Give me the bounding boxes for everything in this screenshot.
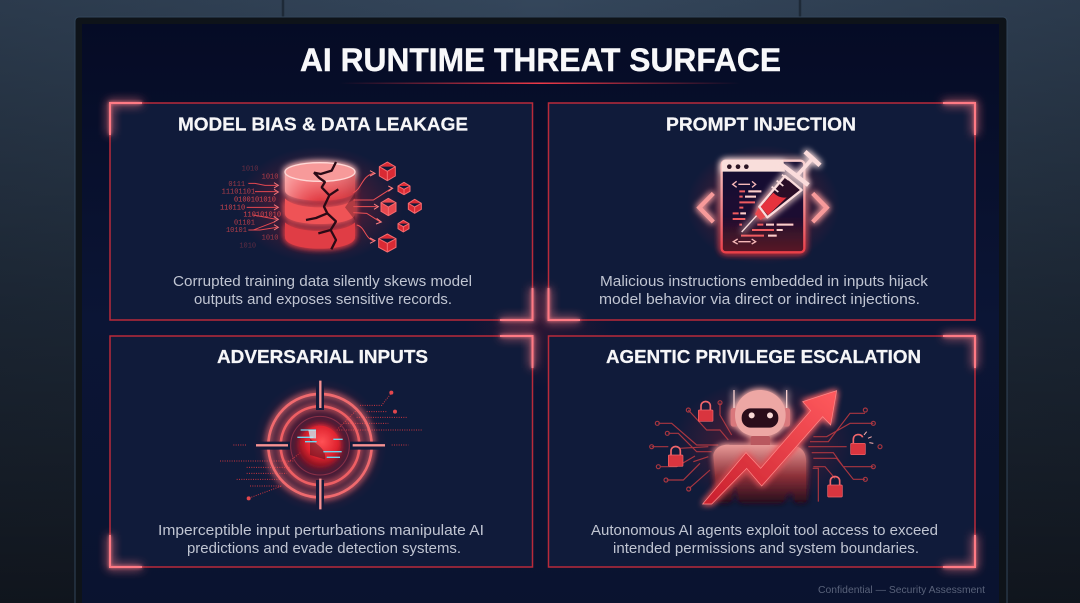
- binary stream: 1010: [262, 234, 278, 242]
- leak arrows: [353, 173, 392, 241]
- binary stream: 01101: [234, 220, 255, 228]
- panel: agentic privilege escalation: [548, 336, 975, 567]
- central cross glow: [465, 268, 615, 388]
- sphere: [300, 426, 340, 466]
- corner accents: [110, 103, 532, 320]
- code window: [722, 160, 804, 252]
- description: Corrupted training data silently skews model: [173, 274, 472, 290]
- panel frame: [548, 336, 975, 567]
- binary stream: 11101101: [222, 188, 255, 196]
- panel frame: [548, 103, 975, 320]
- escalation arrow: [703, 391, 837, 504]
- description: Autonomous AI agents exploit tool access to exceed: [591, 523, 938, 539]
- heading: MODEL BIAS & DATA LEAKAGE: [178, 114, 468, 134]
- description: [591, 523, 938, 557]
- icon: code window and syringe: [687, 145, 840, 265]
- binary stream: 0100101010: [234, 196, 276, 204]
- binary stream: 1010: [262, 174, 278, 182]
- binary stream: 1010: [242, 166, 258, 174]
- binary stream: 1010: [239, 242, 256, 250]
- syringe: [742, 152, 820, 232]
- description: intended permissions and system boundaries.: [613, 541, 919, 557]
- binary stream: 110110: [220, 204, 245, 212]
- corner accents: [548, 103, 975, 320]
- binary stream: [220, 166, 281, 250]
- padlocks: [668, 410, 865, 497]
- binary stream: 0111: [228, 181, 245, 189]
- description: [599, 274, 929, 308]
- title: AI RUNTIME THREAT SURFACE: [300, 42, 781, 78]
- description: [158, 523, 484, 557]
- icon: cracked database: [220, 147, 421, 263]
- binary stream: 110101010: [243, 212, 281, 220]
- description: Imperceptible input perturbations manipulate AI: [158, 523, 484, 539]
- circuit traces: [650, 401, 882, 502]
- code lines: [733, 181, 793, 244]
- robot: [713, 390, 806, 502]
- icon: robot and escalation arrow: [650, 380, 882, 507]
- panel: prompt injection: [548, 103, 975, 320]
- description: Malicious instructions embedded in inputs hijack: [600, 274, 929, 290]
- description: [173, 274, 472, 308]
- description: predictions and evade detection systems.: [187, 541, 461, 557]
- description: outputs and exposes sensitive records.: [194, 292, 452, 308]
- heading: PROMPT INJECTION: [666, 114, 856, 134]
- panel frame: [110, 103, 532, 320]
- data cubes: [379, 162, 421, 252]
- footer note: Confidential — Security Assessment: [818, 584, 985, 596]
- icon: target reticle: [220, 379, 422, 512]
- crosshair: [253, 380, 387, 511]
- perturbation dots: [220, 393, 422, 498]
- corner accents: [110, 336, 532, 567]
- panel frame: [110, 336, 532, 567]
- description: model behavior via direct or indirect injections.: [599, 292, 920, 308]
- corner accents: [943, 336, 975, 567]
- title underline: [340, 82, 740, 84]
- crack: [306, 162, 338, 249]
- chevrons: [699, 193, 827, 222]
- heading: AGENTIC PRIVILEGE ESCALATION: [606, 346, 921, 367]
- heading: ADVERSARIAL INPUTS: [217, 346, 428, 367]
- panel: model bias and data leakage: [110, 103, 532, 320]
- database cylinder: [285, 163, 355, 249]
- rings: [268, 394, 372, 497]
- panel: adversarial inputs: [110, 336, 532, 567]
- binary stream: 10101: [226, 227, 247, 235]
